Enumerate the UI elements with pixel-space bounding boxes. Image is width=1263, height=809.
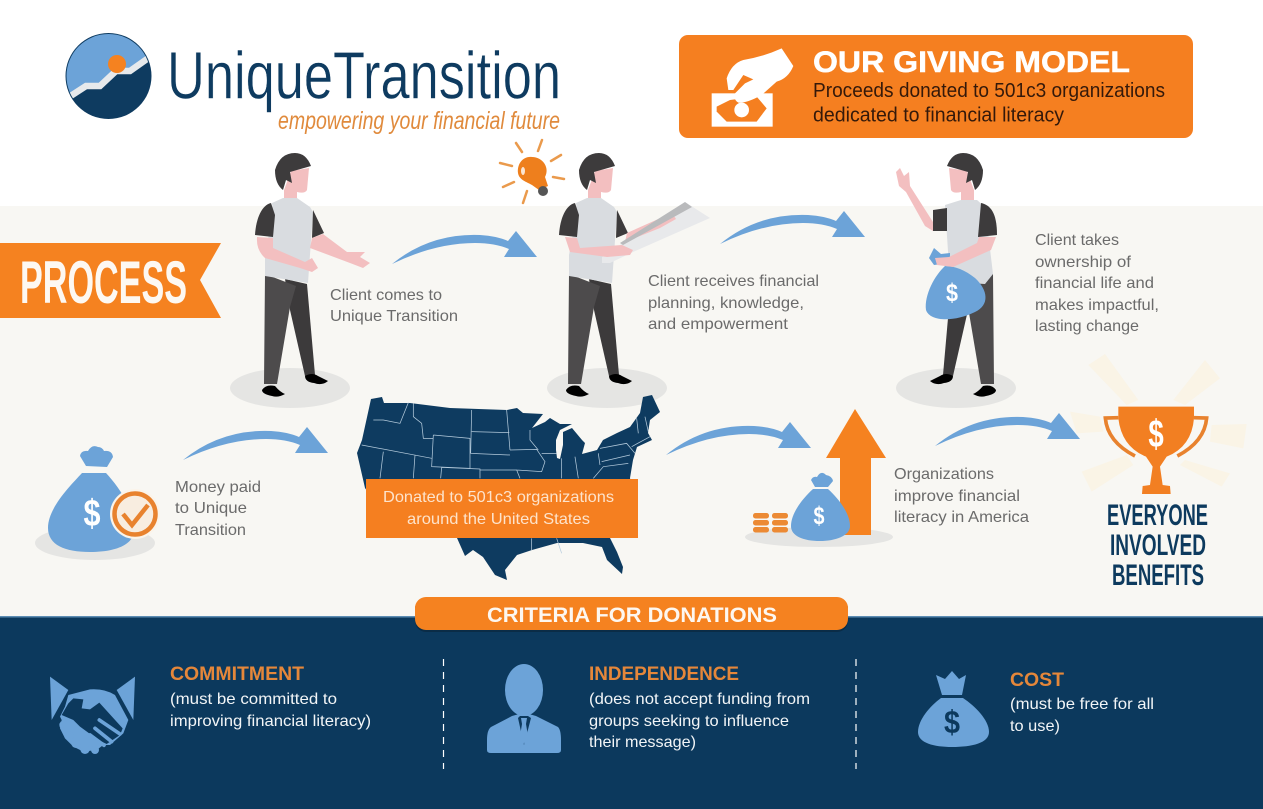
icon: money bag held: [926, 248, 986, 319]
heading: our giving model: OUR GIVING MODEL: [813, 46, 1130, 79]
step text: client receives: Client receives financial: [648, 273, 819, 290]
icon: money bag: $: [944, 704, 960, 740]
text: cost: [1010, 669, 1154, 735]
logo wordmark: UniqueTransition: [167, 38, 561, 114]
icon: hand giving money: [712, 48, 793, 127]
arrow 4: [666, 422, 811, 455]
arrow 3: [183, 427, 328, 460]
step text: money paid: to Unique: [175, 500, 247, 517]
logo icon: [66, 33, 152, 119]
heading: everyone involved benefits: BENEFITS: [1112, 559, 1204, 592]
step text: organizations: improve financial: [894, 488, 1020, 505]
icon: person silhouette: [487, 664, 561, 753]
text: cost: (must be free for all: [1010, 696, 1154, 713]
step text: client receives: planning, knowledge,: [648, 295, 804, 312]
icon: light bulb: [500, 140, 564, 203]
criterion: cost: [918, 669, 1154, 747]
heading: everyone involved benefits: [1107, 499, 1208, 592]
giving model description: [813, 80, 1165, 126]
step text: client takes: [1035, 232, 1159, 335]
step text: client comes: [330, 287, 458, 325]
step text: organizations: Organizations: [894, 466, 994, 483]
banner: process: PROCESS: [20, 249, 187, 316]
person 3: client takes ownership: [896, 153, 1016, 408]
text: independence: their message): [589, 734, 696, 751]
step text: client takes: lasting change: [1035, 318, 1139, 335]
step text: money paid: Money paid: [175, 479, 261, 496]
step text: client takes: Client takes: [1035, 232, 1119, 249]
icon: handshake: [50, 677, 135, 754]
giving model description: dedicated to financial literacy: [813, 104, 1064, 126]
icon: growth arrow with money: $: [814, 502, 825, 530]
logo tagline: empowering your financial future: [278, 107, 560, 135]
map: United States: [357, 395, 660, 580]
text: independence: INDEPENDENCE: [589, 663, 739, 685]
callout: donated: [366, 479, 638, 538]
text: commitment: [170, 663, 371, 730]
step text: money paid: Transition: [175, 522, 246, 539]
icon: trophy with rays: [1070, 354, 1247, 494]
icon: trophy with rays: $: [1148, 412, 1164, 456]
text: cost: to use): [1010, 718, 1060, 735]
heading: criteria for donations: CRITERIA FOR DONATIONS: [487, 604, 777, 627]
text: independence: groups seeking to influence: [589, 713, 789, 730]
text: commitment: COMMITMENT: [170, 663, 304, 685]
step text: client receives: and empowerment: [648, 316, 789, 333]
icon: money bag: [918, 671, 989, 747]
panel: our giving model: [679, 35, 1193, 138]
step text: organizations: literacy in America: [894, 509, 1029, 526]
icon: money bag with check: $: [84, 493, 100, 535]
arrow 1: [392, 231, 537, 264]
background: white header: [0, 0, 1263, 206]
callout: donated: around the United States: [407, 511, 590, 528]
text: independence: (does not accept funding from: [589, 691, 810, 708]
arrow 2: [720, 211, 865, 244]
step text: money paid: [175, 479, 261, 539]
icon: growth arrow with money: [745, 409, 893, 547]
icon: money bag with check: [35, 446, 160, 560]
logo: Unique Transition: [60, 25, 561, 135]
step text: client takes: makes impactful,: [1035, 297, 1159, 314]
step text: client comes: Unique Transition: [330, 308, 458, 325]
panel: criteria band: [0, 616, 1263, 809]
step text: client comes: Client comes to: [330, 287, 442, 304]
arrow 5: [935, 413, 1080, 446]
text: commitment: improving financial literacy): [170, 713, 371, 730]
person 2: client receives: [547, 153, 710, 408]
icon: money bag held: $: [946, 279, 958, 307]
step text: client takes: ownership of: [1035, 254, 1132, 271]
person 1: client arrives: [230, 153, 370, 408]
step text: client receives: [648, 273, 819, 333]
background: process band: [0, 206, 1263, 617]
text: independence: [589, 663, 810, 751]
giving model description: Proceeds donated to 501c3 organizations: [813, 80, 1165, 102]
criterion: independence: [487, 663, 810, 753]
step text: client takes: financial life and: [1035, 275, 1154, 292]
criterion: commitment: [50, 663, 371, 754]
heading: criteria for donations: [415, 597, 848, 632]
banner: process: [0, 243, 221, 318]
heading: everyone involved benefits: INVOLVED: [1110, 529, 1206, 562]
callout: donated: Donated to 501c3 organizations: [383, 489, 614, 506]
step text: organizations: [894, 466, 1029, 526]
text: commitment: (must be committed to: [170, 691, 337, 708]
text: cost: COST: [1010, 669, 1064, 691]
